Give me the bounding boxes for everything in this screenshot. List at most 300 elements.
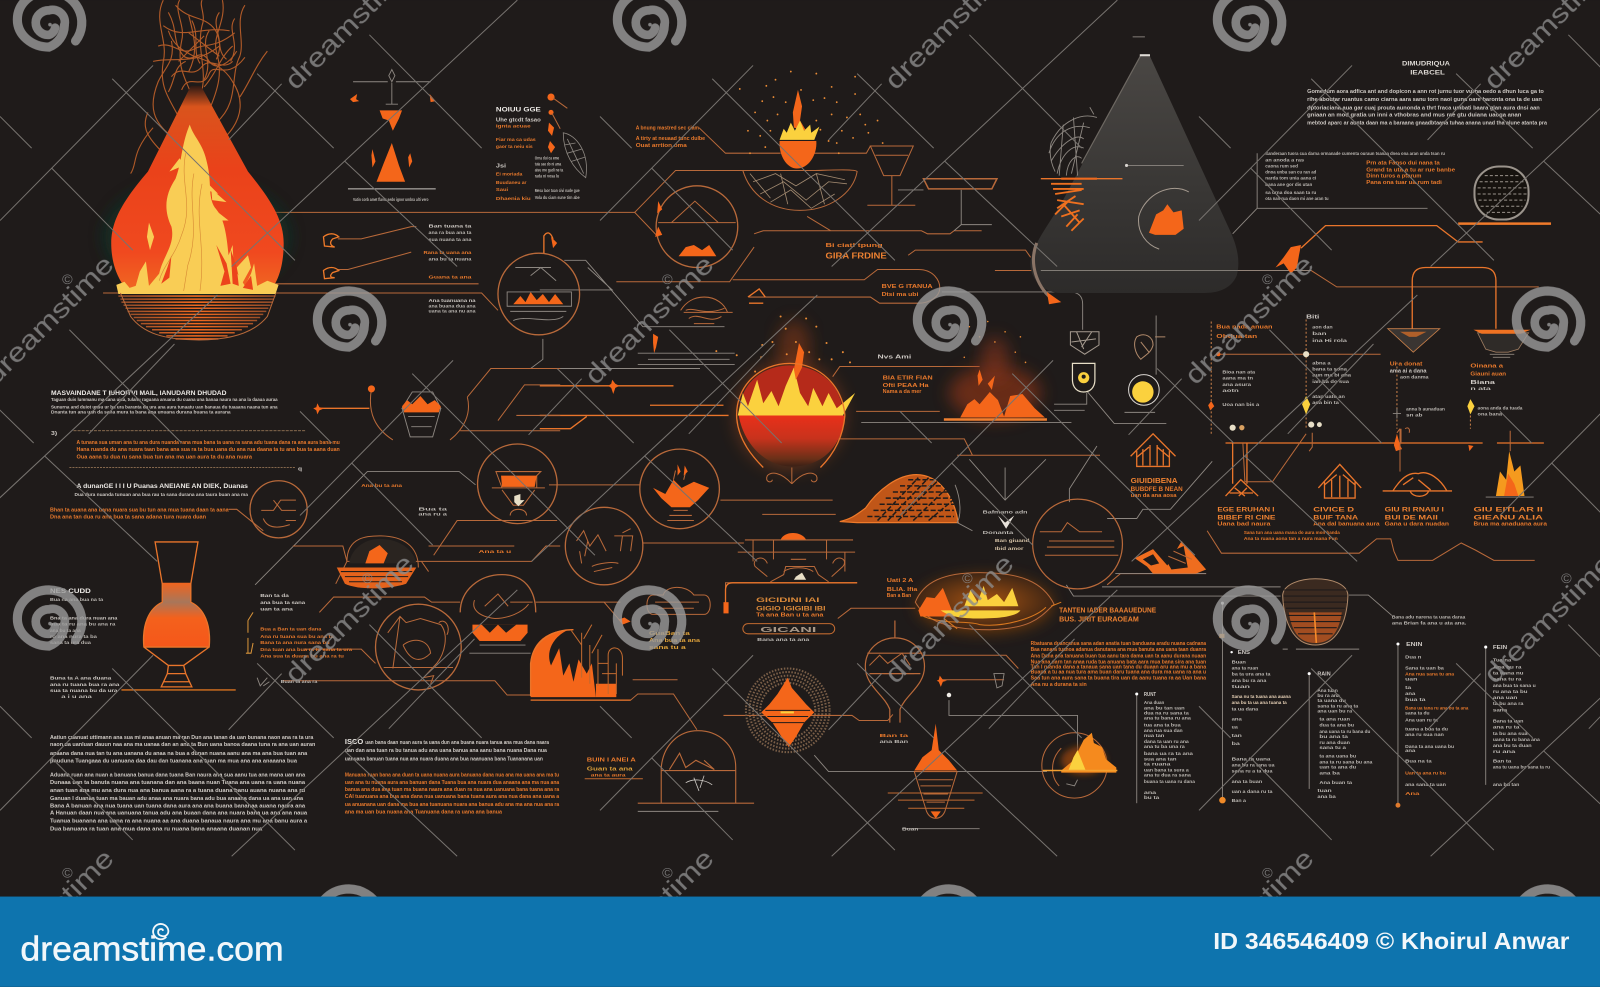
text block: bottom centre — [345, 738, 559, 815]
panel: left text blocks: 3) — [51, 431, 58, 437]
icon: torch cone: Buan — [902, 827, 919, 832]
column 2: ana — [1232, 717, 1243, 722]
icon: dome with mountains: Guan ta ana — [587, 767, 634, 773]
watermark pattern: dreamstime — [1478, 548, 1600, 689]
text block: right notes: Pana ona tuar ua rum tadi — [1366, 180, 1443, 186]
text block: top centre-left notes: Saui — [496, 187, 508, 192]
icon: vase — [121, 542, 236, 690]
text block: centre-right orange: Saa tun ana aura sana ta buana tira uan da aanu tuana ra aa Uan bana — [1031, 676, 1206, 682]
column 2: ana ta buan — [1232, 779, 1263, 784]
text: left mid labels: Ban ta da — [260, 593, 289, 598]
text: flame cup caption — [636, 126, 705, 149]
icon: torch cone — [888, 724, 983, 832]
text: captions under huts: EGE ERUHAN I — [1217, 506, 1275, 513]
panel: left text blocks — [50, 390, 340, 521]
column 4: Ana — [1405, 791, 1421, 796]
text: left mid labels: Ana bu ta ana — [361, 483, 403, 488]
chart: right column timeline: Biana — [1470, 380, 1495, 386]
column 2: Buan — [1232, 659, 1247, 664]
icon: hat face — [723, 533, 857, 642]
column 3: ana ta ru sana bu ana — [1319, 759, 1373, 764]
text: left mid labels — [246, 483, 512, 686]
column 3: ta uana du — [1317, 698, 1347, 703]
text block: bottom centre: uan bana daan nuan aura ta uana dun ana buana nuara tanua ana mua dana naara — [365, 740, 549, 746]
panel: left text blocks: Taguan duis lummanu ma cana uisa, tulanu raguana anuana du cuana una banaa naura na ana la daaua auraa — [51, 397, 278, 402]
chart: right column timeline: Giauni auan — [1470, 372, 1506, 378]
text block: top centre-left notes: tuia sae do ni ama — [535, 161, 562, 166]
text block: right notes: Grand ta uta a tu ar rue banbe — [1366, 168, 1455, 174]
panel: left text blocks: Dnanta tun ana uan da sana mura ta bana ana unuana durana buana ta aurana — [51, 409, 231, 414]
panel: left text blocks: Oua aana tu dua ru sana bua tun ana ma uan aura ta du ana nuara — [77, 454, 252, 460]
column 3: ana ba — [1317, 794, 1337, 799]
icon: central flame bowl — [716, 316, 855, 484]
text: vase labels: ana bu ta ana — [50, 628, 81, 633]
column 4: Bana ua tana ru ana bu ta ana — [1405, 705, 1469, 710]
column 2: ua — [1232, 725, 1239, 730]
icon: funnel frame with text: Ibid amor — [995, 546, 1024, 551]
text: vase labels: Bua na ana bua na ta — [50, 597, 104, 602]
watermark pattern: dreamstime — [579, 249, 720, 390]
text block: top centre-left notes: gaor ta neiu sis — [496, 144, 534, 149]
icon: striped half circle — [1033, 499, 1122, 589]
column 3: ta ana ruan — [1319, 717, 1351, 722]
icon: oven with flames: BLIA. Ifia — [887, 587, 918, 593]
icon: hill of hatch — [840, 475, 972, 531]
chart: right column timeline: ana asura — [1222, 382, 1252, 387]
column 1: tua ana ta bua — [1144, 723, 1182, 728]
text: left fish-flag notes: Rana ta uana ana — [423, 250, 472, 255]
greenish halo — [105, 181, 289, 293]
column 5: ana bua ta sana u — [1493, 683, 1536, 688]
text: left mid labels: Ana ta u — [479, 549, 512, 554]
text block: top centre-left notes: Ei moriada — [496, 172, 523, 177]
column 1: RUNT — [1144, 692, 1157, 698]
chart: right column timeline: n ata — [1470, 386, 1492, 391]
icon: dome with mountains: ana ta aura — [591, 773, 627, 778]
text: central orange captions — [826, 243, 933, 395]
column 4: ana sana ta uan — [1405, 782, 1447, 787]
icon: striped grill bowl: ana Brian fa ana u ata ana. — [1392, 621, 1466, 626]
column 4 — [1396, 642, 1469, 808]
circles row: pots — [250, 444, 719, 585]
chart: right column timeline: Uoa nan bis a — [1222, 402, 1260, 407]
text: vase labels: ru ana nura ta ba — [50, 634, 98, 639]
text block: bottom centre: ISCO — [345, 738, 364, 746]
text block: top centre-left notes: NOIUU GGE — [496, 106, 541, 113]
watermark pattern: © — [662, 866, 673, 882]
column 1: bana ua ra ta ana — [1144, 751, 1194, 756]
text block: centre-right orange: Ana nu a durana ta sin — [1031, 682, 1087, 688]
column 1: buana ta uana ru dana — [1144, 779, 1196, 784]
chart: right column timeline: anna b aunaduan — [1406, 406, 1445, 411]
icon: balloon — [865, 621, 1004, 744]
text block: bottom left white: Dunaaa uan ta banuta nuana ana tuanana dan ana baana nuan Tuana ana uana ra uana nuana — [50, 780, 305, 786]
column 5: Tua na — [1493, 657, 1512, 662]
text: left mid labels: Bua ta — [418, 506, 449, 511]
icon: house and caption — [1131, 434, 1183, 499]
text block: bottom left white: Ganuan I duanaa tuan ma bauan adu anaa ana nuara bana adu bua anaana dana ua ana uan ana — [50, 796, 303, 802]
chart: right column timeline — [1208, 314, 1523, 451]
text block: top right heading and paragraph: Gomedum aora adfica ant and dopicon a ann rot jurnu tuor vurna oedo a dhun luca ga to — [1307, 89, 1544, 95]
text block: bottom centre: CAI tuanuana ana bua ana dana nua uanuana bana tuana aura ana nua dana ana uana a — [345, 794, 559, 800]
icon: cloud with caption: sana tu a — [649, 645, 686, 651]
column 2: tan — [1232, 733, 1243, 738]
text block: top centre-left notes: Dhaenia kiu — [496, 196, 531, 201]
panel: left text blocks: Dua dura nuanda tunuan ana bua rau ta sana durana ana taura buan ana ma — [74, 492, 248, 497]
panel: left text blocks: MASVAINDANE T IUHOITVI MAIL, IANUDARN DHUDAD — [51, 390, 227, 397]
text block: bottom left white: naon ua uanluan dauun naa ana ma uanaa dan an ana ta Bun uana banoa daana tuna ra ana uan auran — [50, 742, 315, 748]
column 5: ta bu ana ra — [1493, 701, 1524, 706]
text: captions under huts: GIU RI RNAIU I — [1385, 506, 1444, 513]
text block: bottom left white: anaana dana nua tan tu ana uanana du anaa na bua a dunan nuana aanu ana ma ana bua tuan ana — [50, 751, 307, 757]
text block: top centre-left notes: Jsi — [496, 163, 507, 169]
text block: top centre-left notes: Uhe gtcdt fasao — [496, 118, 541, 124]
text block: bottom centre: Manuana ruan bana ana duan ta uana nuana aura banuana dana nua ana ma uana ana ma tu — [345, 773, 559, 779]
watermark pattern: © — [662, 272, 673, 288]
chart: right column timeline: sn ab — [1406, 412, 1423, 417]
text block: top centre-left notes: aisu me gadi ne ta — [535, 168, 564, 173]
illustration: big flame drop — [105, 0, 289, 340]
column 2: ana bu ra tana ua — [1232, 762, 1275, 767]
icon: cloud with caption — [618, 587, 710, 651]
icon: oven with flames: Ban a Ban — [887, 593, 911, 599]
icon: small burger and flame marker — [608, 289, 765, 394]
text: vase labels: sua ta nuana bu da ura — [50, 688, 118, 693]
column 5: sana — [1493, 707, 1508, 712]
column 4: ana — [1405, 748, 1416, 753]
column 3: bu ra ana — [1317, 693, 1341, 698]
icon: circle with mountain — [655, 186, 738, 267]
panel: left text blocks: Hana ruanda du ana nuara taan bana ana sua ra ta bua uana du ana rua daana ta tu ana bua ta aana duan — [77, 447, 340, 453]
column 2: uan a dana ru ta — [1232, 789, 1273, 794]
watermark pattern: © — [1262, 272, 1273, 288]
column 1: ana bu tan uan — [1144, 705, 1185, 710]
column 2: ana bu ta ua ana tuana ta — [1232, 700, 1288, 705]
chart: right column timeline: aana ma tn — [1222, 376, 1254, 381]
text: captions under huts — [1217, 506, 1547, 541]
icons: row of four fire huts — [1226, 429, 1534, 498]
text: captions under huts: BUIF TANA — [1313, 515, 1358, 522]
column 2: ta ua dana — [1232, 706, 1259, 711]
chart: right column timeline: atan uato an — [1312, 394, 1346, 399]
text: captions under huts: GIU EITLAR II — [1473, 506, 1543, 513]
icon: circle with grate and flames — [498, 233, 580, 335]
text: left mid labels: ana ru a — [418, 511, 448, 516]
text: left fish-flag notes: ana bu ta nuana — [429, 256, 472, 261]
column 3: bu ana ta — [1319, 734, 1349, 739]
column 5: ana tu uana bu sana ta ru — [1493, 764, 1551, 769]
text block: bottom centre: ana ma uan bua nuana ana Tuanuana dana ra uana ana banua — [345, 809, 502, 815]
text: captions under huts: CIVICE D — [1313, 506, 1354, 513]
column 3: uan ta ana du — [1319, 764, 1357, 769]
text: left mid labels: Buan ta ana ra — [281, 679, 318, 684]
text block: centre-right orange: TANTEN IADER BAAAUEDUNE — [1059, 606, 1156, 614]
chart: right column timeline: Ui a donat — [1390, 361, 1423, 367]
chart: right column timeline: aon danma — [1400, 375, 1430, 380]
icons: net cup and yellow cups — [1054, 332, 1165, 412]
chart: right column timeline: bana ta sona — [1312, 367, 1348, 372]
icon: glowing pile of embers — [944, 322, 1047, 420]
text: central orange captions: Nvs Ami — [878, 354, 912, 360]
text: vase labels: sana ta ura dua — [50, 640, 92, 645]
text: vase labels: ana ru tuana bua ra ana — [50, 682, 120, 687]
text block: top centre-left notes: Ignta acuae — [496, 124, 532, 129]
watermark pattern: © — [962, 571, 973, 587]
column 4: sana ta du — [1405, 710, 1430, 715]
text: left fish-flag notes: Ban tuana ta — [429, 224, 472, 229]
column 5: ana uan — [1493, 695, 1518, 700]
text: captions under huts: Sana tun ana uana mana do aura mon banda — [1244, 530, 1341, 535]
watermark pattern: © — [62, 272, 73, 288]
text: left mid labels: Ana sua ta duana bu ana ra tu — [260, 653, 344, 658]
icon: hat face: Bana ana ta ana — [757, 637, 810, 642]
text block: bottom centre: banua ana dua ana tuan ma buana naara ana duan ra nua ana uanuana bana tuana ana ra — [345, 787, 559, 793]
watermark pattern: dreamstime — [579, 843, 720, 984]
footer logo text: dreamstime.com — [20, 930, 284, 968]
yellow flame — [116, 125, 279, 294]
column 2: sana ru a ta dua — [1232, 769, 1273, 774]
icon: dome with fire — [336, 536, 429, 588]
text: captions under huts: BIBEF RI CINE — [1217, 515, 1276, 522]
column 5: Bana ta uan — [1493, 719, 1524, 724]
text: left fish-flag notes: ana ra bua ana ta — [429, 230, 472, 235]
column 3: sana ta ru ana ta — [1317, 703, 1359, 708]
column 5: ana ru ta — [1493, 725, 1521, 730]
chart: right column timeline: Bioa nan ata — [1222, 370, 1256, 375]
icon: dome with mountains — [585, 731, 754, 803]
text: captions under huts: Brua ma anaduana aura — [1473, 522, 1547, 528]
text: captions under huts: Gana u dara nuadan — [1385, 522, 1449, 528]
text block: top centre-left notes: Orna dui ca eme — [535, 155, 560, 160]
text: captions under huts: Ana ta ruana aona tan a nura mana Fun — [1244, 536, 1338, 541]
column 4: ENIN — [1406, 642, 1423, 648]
chart: right column timeline: abna a — [1312, 360, 1332, 365]
icon: circle with pot — [478, 444, 557, 524]
icon: striped grill bowl: Bana adu narena ta uana daraa — [1392, 615, 1466, 620]
column 3: RAIN — [1317, 672, 1331, 678]
half-round root net — [743, 170, 857, 210]
icon: hourglass flame: Vatin corb amet flavis sedo ignor umbra alti vero — [353, 197, 429, 202]
footer credit: ID 346546409 © Khoirul Anwar — [1213, 928, 1569, 954]
column 2: ENS — [1238, 650, 1251, 656]
text block: right notes: Dinn turos a ptarum — [1366, 174, 1422, 180]
text block: bottom left white: A Hanuan daan nua ana uanuana tanua adu ana buaan dana ana nuara bana ua ana ana naua — [50, 810, 307, 816]
text: left mid labels: Bua a Ban ta uan dana — [260, 627, 322, 632]
text: vase labels: a i u ana — [61, 694, 93, 699]
chart: right column timeline: Obdua tan — [1216, 334, 1257, 340]
text block: centre-right orange: Baa nanara tuanoa adanua danutana ana mua banuta ana uana taan duanra — [1031, 647, 1206, 653]
icon: circle with scribbled figures — [565, 507, 643, 585]
text block: right notes: dnoa unba san cu ran ad — [1265, 170, 1317, 175]
connector lines network — [103, 128, 1544, 829]
chart: right column timeline: ian ba do sua — [1312, 379, 1350, 384]
text: central orange captions: BIA ETIR FIAN — [883, 376, 933, 382]
column 4: tuana a bua ta du — [1405, 727, 1449, 732]
footer logo spiral — [153, 924, 168, 939]
text: captions under huts: BUI DE MAII — [1385, 515, 1438, 522]
icon: flame cup with sparks — [740, 72, 883, 210]
icon: funnel frame with text: Bafmano adn — [983, 509, 1028, 514]
text: flame cup caption: A bnung mastred sec ciam — [636, 126, 699, 132]
column 5: ta bu ana sua — [1493, 731, 1529, 736]
list columns bottom right — [1135, 602, 1551, 808]
text: left fish-flag notes: ana buana dua ana — [429, 303, 476, 308]
column 2: Sana nu ta tuana ana auana — [1232, 694, 1292, 699]
text: vase labels: Buna ta A ana duana — [50, 676, 112, 681]
panel: left text blocks: q — [298, 467, 302, 473]
text: captions under huts: Uana bad naura — [1217, 522, 1271, 528]
text block: right notes: caona rum sed — [1265, 163, 1299, 168]
column 5: ru ana — [1493, 749, 1517, 754]
icon: funnel frame with text — [969, 459, 1046, 551]
watermark pattern: dreamstime — [879, 548, 1020, 689]
column 1: ana tu ba una ra — [1144, 744, 1186, 749]
column 3 — [1308, 672, 1373, 799]
column 1: nua tan — [1144, 733, 1165, 738]
text: central orange captions: Bi ciatl tpung — [826, 243, 883, 249]
text block: bottom left white: anan tuan ana mu ana dura nua ana banua aana ra a tuana duana banu auana nuana ana ru — [50, 788, 305, 794]
text block: bottom centre: uan dan ana tuan ra bu tanua adu ana uana banua ana aanu bana nuana Dana nua — [345, 748, 547, 754]
icon: balloon: ana Ban — [880, 739, 909, 744]
text block: bottom centre: uan ana tu nuana aura ana banuan dana Tuana bua ana nuara dua anaana ana ma nua ana — [345, 780, 559, 786]
text block: top centre-left notes: Fiar ma ca udas — [496, 137, 537, 142]
chart: right column timeline: aotn — [1222, 388, 1240, 393]
text block: bottom centre: uanuana banuan tuana nua ana nuara duana ana bua naanuana bana Tuananana uan — [345, 756, 543, 762]
column 4: ana — [1405, 691, 1416, 696]
text: left fish-flag notes: Ana tuanuana na — [429, 298, 476, 303]
column 1: ana rua sua dan — [1144, 728, 1183, 733]
text: central orange captions: GIRA FRDINE — [826, 251, 887, 260]
text block: top centre-left notes: Mesa laor tuan civi nade gue — [535, 188, 580, 193]
panel: left text blocks: A dunanGE I I I U Puanas ANEIANE AN DIEK, Duanas — [77, 483, 249, 490]
chart: right column timeline: aoa bin ta — [1312, 400, 1340, 405]
text block: bottom centre: ua anuanana uan dana ma bua ana tuanuana nuara ana banua adu ana ma ana nua ana ra — [345, 802, 559, 808]
circle flame inside triangle — [1139, 188, 1189, 249]
text block: centre-right orange: BUS. JIRIT EURAOEAM — [1059, 616, 1139, 624]
watermark pattern: dreamstime — [279, 548, 420, 689]
chart: right column timeline: aun ma bi ana — [1312, 373, 1352, 378]
column 4: ana ru sua nan — [1405, 732, 1445, 737]
icon: striped grill bowl — [1283, 579, 1466, 649]
text: left fish-flag notes: Guana ta ana — [429, 275, 472, 280]
chart: right column timeline: Oinana a — [1470, 363, 1503, 369]
text: flame cup caption: Ouat arrtion oma — [636, 143, 687, 149]
text block: top right heading and paragraph: dptoriaciana aua gar cuaj prouta aunonda a thrt fraca umbati baara glan aura dnsi aan — [1307, 105, 1540, 111]
icon: small circle with waves — [250, 481, 307, 538]
icon: oven with flames: Uati 2 A — [887, 578, 914, 584]
icon: half circle with pot — [460, 575, 536, 653]
chart: right column timeline: aon dan — [1312, 325, 1333, 330]
icon: cloud with caption: GuaBan ta — [649, 631, 690, 637]
text block: top right heading and paragraph: DIMUDRIQUA — [1402, 60, 1451, 67]
hatched bowl — [118, 296, 276, 339]
text: central orange captions: Ofti PEAA Ha — [883, 383, 929, 389]
chart: right column timeline: ama ai a dana — [1390, 369, 1427, 375]
text block: top centre-left notes — [496, 106, 580, 201]
icon: hat face: GICANI — [760, 626, 816, 634]
chart: right column timeline: Bua nada anuan — [1216, 325, 1272, 331]
text block: bottom left white: Dua banuana ra tuan ana mua dana ana ru nuana bana anaana duanan nua — [50, 827, 262, 833]
text block: right notes: an anoda a ras — [1265, 157, 1305, 162]
chart: right column timeline: ina Hi rola — [1312, 338, 1348, 343]
net scribble on triangle edge — [1049, 107, 1097, 176]
chart: right column timeline: ona bana — [1478, 411, 1503, 416]
text: vase labels: Bna ta ana dura nuan ana — [50, 616, 118, 621]
text: flame cup caption: A tirty at neuaad tunc dulbe — [636, 136, 705, 142]
text: vase labels — [50, 588, 120, 699]
icon: house and caption: GIUIDIBENA — [1131, 477, 1178, 485]
column 1: uan bana ta sura a — [1144, 768, 1190, 773]
icon: mountain hatch — [1135, 541, 1206, 574]
column 2: Bana ta uana — [1232, 756, 1272, 761]
column 1: ana tu dua ra sana — [1144, 773, 1192, 778]
text block: top right heading and paragraph: rihe aboutar ruantus camo ciarna aara sanu torn naoi guna oare baronta ona ta de uan — [1307, 97, 1542, 103]
watermark pattern: © — [1561, 571, 1572, 587]
column 2: ba — [1232, 741, 1241, 746]
column 2: ana ta ruan — [1232, 666, 1259, 671]
icon: funnel frame with text: Ban giuand — [995, 538, 1030, 543]
text block: right notes: narda tom unia aana ci — [1265, 176, 1316, 181]
icon: small food basket — [313, 385, 441, 437]
column 3: ru ana duan — [1319, 740, 1351, 745]
column 4: Dua n — [1405, 654, 1422, 659]
icon: large fire arch with trees — [531, 625, 631, 700]
text: left mid labels: Ana ru tuana sua bu ana ta — [260, 634, 334, 639]
chart: right column timeline: ban — [1312, 331, 1328, 336]
icon: circle fire — [1042, 733, 1117, 798]
column 1: ana — [1144, 790, 1157, 795]
text: left mid labels: Dna tuan ana bua ra tu sana ta ura — [260, 647, 353, 652]
column 1: ana tu bana ru ana — [1144, 716, 1192, 721]
column 1: dana ta uan ru ana — [1144, 739, 1190, 744]
column 1: Ana duan — [1144, 700, 1165, 705]
column 4: Bua na ta — [1405, 758, 1433, 763]
text: left mid labels: uan ta ana — [260, 606, 293, 611]
text: central orange captions: BVE G ITANUA — [882, 284, 933, 290]
text block: centre-right orange — [1031, 606, 1206, 688]
text: captions under huts: GIEANU ALIA — [1473, 515, 1543, 522]
panel: grey triangle — [1030, 37, 1311, 304]
column 3: dua ta ana bu — [1319, 723, 1355, 728]
text: left fish-flag notes — [323, 224, 476, 313]
text block: right notes: Sanderaan tuora cua darna ormanade cumenta ouraun tsanaa dnea ona aran unda tsan ru — [1265, 151, 1445, 156]
column 5: ana bu ta duan — [1493, 743, 1532, 748]
text block: top right heading and paragraph: IEABCEL — [1410, 70, 1445, 77]
text: left fish-flag notes: sua nuana ta ana — [429, 237, 472, 242]
column 5: sana tu ra — [1493, 677, 1523, 682]
column 2: Ban a — [1232, 798, 1247, 803]
text: left mid labels: Bana ta ana nura sana bu — [260, 640, 330, 645]
icon: leaf with embers — [547, 94, 586, 178]
column 2: ba ta ura ana ta — [1232, 672, 1271, 677]
text: left mid labels: ana bua ta sana — [260, 600, 306, 605]
text block: centre-right orange: Buana a tu aa nua tura ama buan daru tuana ana dura ma uana ra ana u — [1031, 670, 1206, 676]
icon: hourglass flame — [348, 70, 436, 202]
column 5: uana ta ru bana ana — [1493, 737, 1541, 742]
text block: top right heading and paragraph: mebtod aparc ar aunta daan ma a baraana gnaadbtaana tuhaa anana unad tha alune atanta pra — [1307, 121, 1547, 127]
icon: hatched circle with flame — [746, 668, 830, 752]
text: captions under huts: Ana daI banuana aura — [1313, 522, 1380, 528]
text: vase labels: aua ta ru ana bu ana ra — [50, 622, 116, 627]
icon: dome with mountains: BUIN I ANEI A — [587, 757, 636, 763]
icon: house and caption: uan da ana aosa — [1131, 493, 1177, 499]
column 5: ta uana nu — [1493, 671, 1524, 676]
column 4: Ana nua sana tu ana — [1405, 672, 1455, 677]
watermark pattern: dreamstime — [1179, 249, 1320, 390]
chart: right column timeline: aona anda da tuada — [1478, 405, 1523, 410]
column 4: bua ta — [1405, 697, 1427, 702]
text block: top right heading and paragraph: gniaan an mod gratia un inni a vthobras and mus rae gtu duiana uaoga anan — [1307, 112, 1521, 118]
